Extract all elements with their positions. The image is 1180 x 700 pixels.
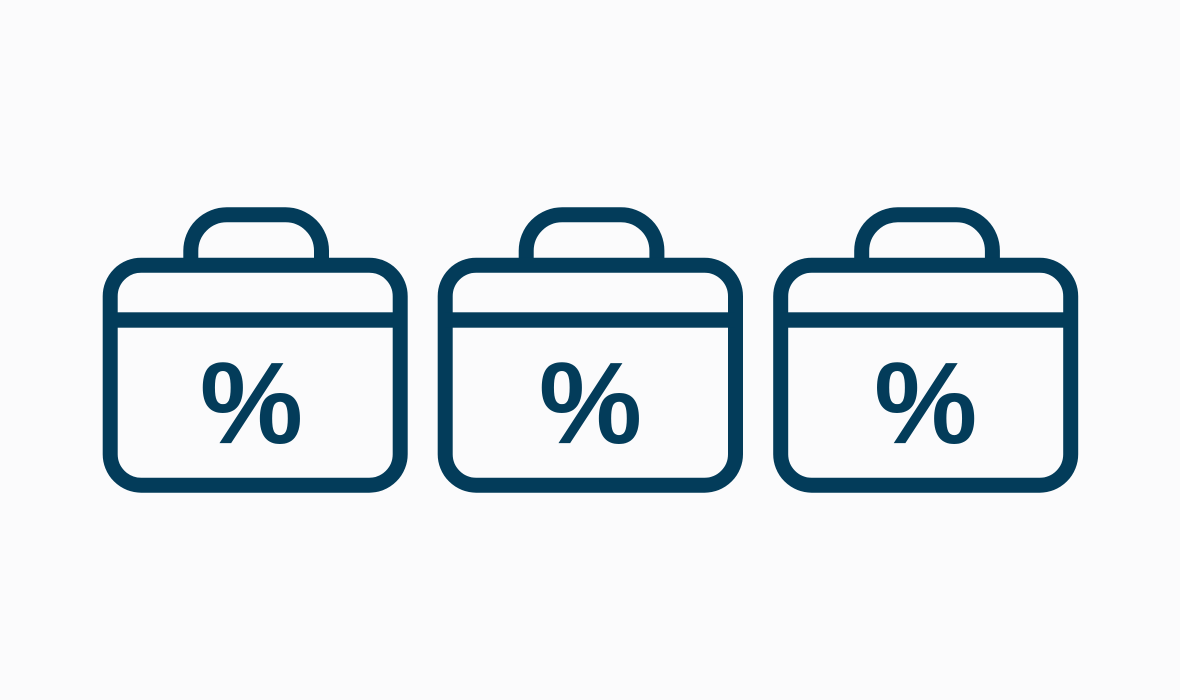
percent sign 1: % <box>200 338 303 468</box>
percent sign 2: % <box>539 338 642 468</box>
percent sign 3: % <box>874 338 977 468</box>
icon: briefcase 1 <box>110 215 400 485</box>
icon: briefcase 2 <box>445 215 736 485</box>
icon: briefcase 3 <box>780 215 1071 485</box>
